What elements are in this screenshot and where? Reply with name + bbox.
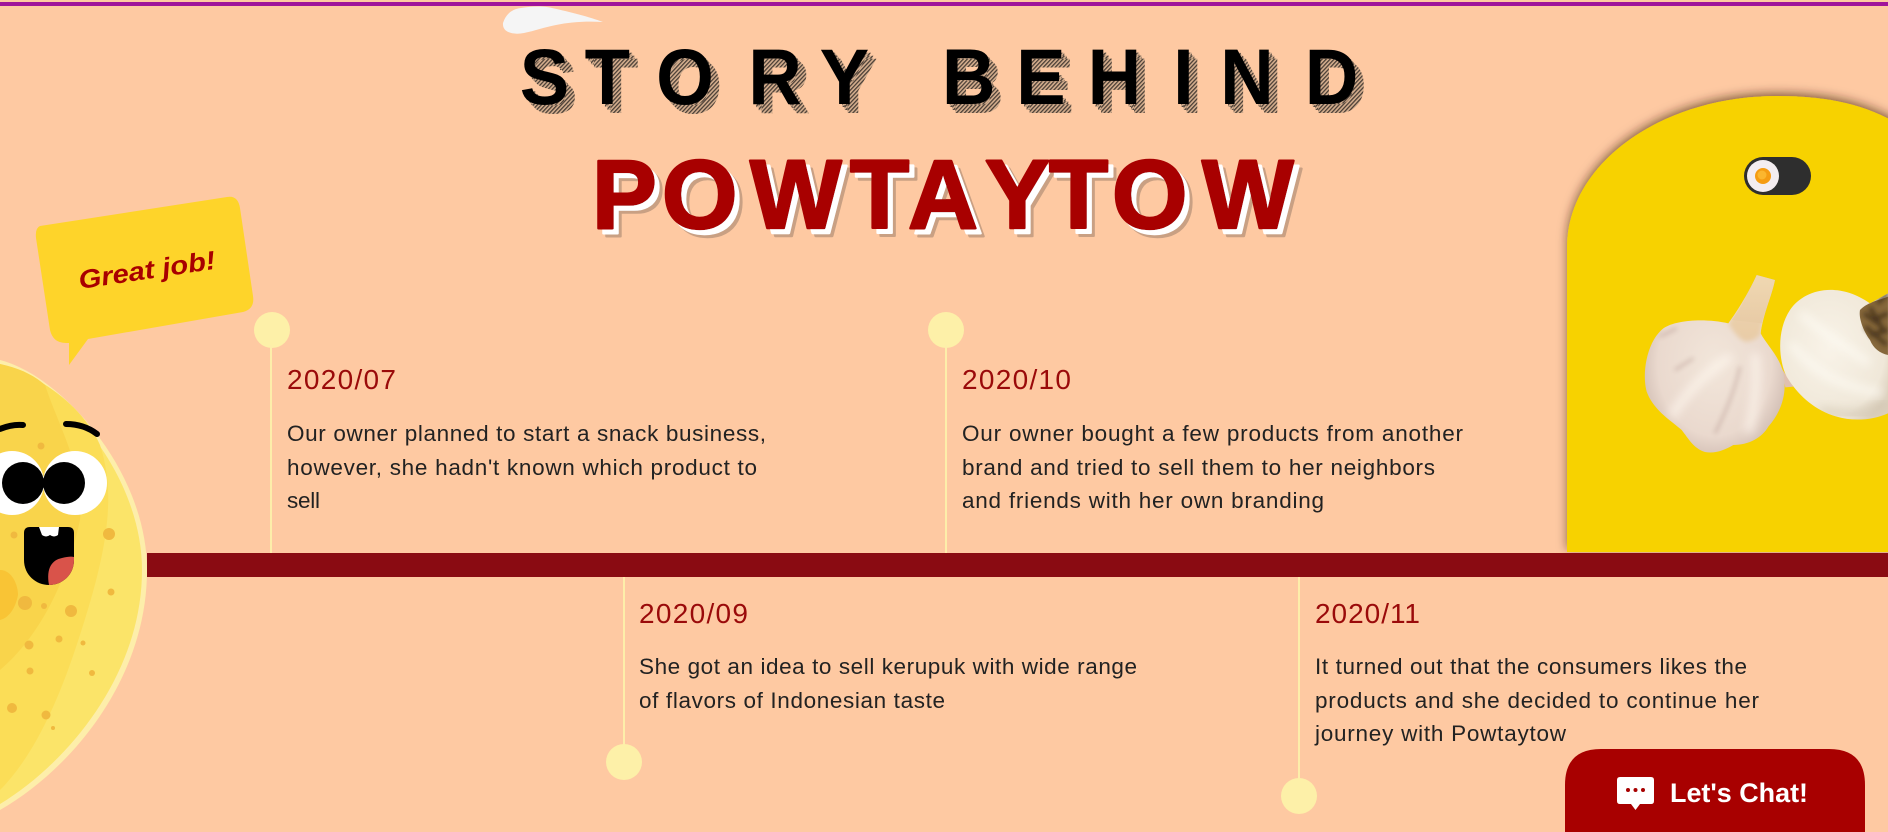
chat button — [1565, 749, 1865, 832]
timeline entry: 2020/09: of flavors of Indonesian taste — [639, 688, 945, 713]
timeline entry: 2020/10: 2020/10 — [962, 364, 1071, 395]
chat button: Let's Chat! — [1670, 778, 1808, 808]
toggle switch — [1744, 157, 1811, 195]
timeline entry: 2020/10: brand and tried to sell them to her neighbors — [962, 455, 1435, 480]
icon: chat bubble — [1617, 777, 1654, 810]
mascot mouth — [24, 527, 74, 585]
timeline entry: 2020/07: however, she hadn't known which product to — [287, 455, 757, 480]
timeline entry: 2020/11: 2020/11 — [1315, 598, 1420, 629]
speech bubble: great job — [36, 197, 253, 365]
timeline entry: 2020/09 — [606, 577, 1137, 780]
timeline entry: 2020/11 — [1281, 577, 1760, 814]
arch background — [1567, 96, 1888, 552]
timeline entry: 2020/09: 2020/09 — [639, 598, 748, 629]
timeline entry: 2020/07: Our owner planned to start a snack business, — [287, 421, 766, 446]
garlic bulbs — [1645, 275, 1888, 453]
mascot eyebrows — [0, 424, 97, 434]
timeline entry: 2020/11: It turned out that the consumers likes the — [1315, 654, 1747, 679]
mascot eyes — [0, 451, 107, 515]
mascot spots — [7, 442, 115, 730]
timeline entry: 2020/07 — [254, 312, 766, 553]
yellow arch panel with garlic — [1567, 96, 1888, 552]
timeline bar — [147, 553, 1888, 577]
mascot: potato character — [0, 360, 147, 810]
title: powtaytow: POWTAYTOW — [592, 140, 1294, 249]
timeline entry: 2020/11: products and she decided to continue her — [1315, 688, 1760, 713]
timeline entry: 2020/11: journey with Powtaytow — [1314, 721, 1567, 746]
top border line — [0, 2, 1888, 6]
timeline entry: 2020/07: 2020/07 — [287, 364, 396, 395]
decorative white swoosh — [503, 6, 603, 34]
timeline entry: 2020/10: and friends with her own branding — [962, 488, 1324, 513]
title: story behind: STORY BEHIND — [520, 34, 1358, 122]
timeline entry: 2020/10 — [928, 312, 1464, 553]
title: story behind: STORY BEHIND — [520, 34, 1358, 122]
speech bubble: great job: Great job! — [76, 245, 218, 295]
timeline entry: 2020/10: Our owner bought a few products from another — [962, 421, 1464, 446]
timeline entry: 2020/07: sell — [287, 488, 320, 513]
timeline entry: 2020/09: She got an idea to sell kerupuk with wide range — [639, 654, 1137, 679]
